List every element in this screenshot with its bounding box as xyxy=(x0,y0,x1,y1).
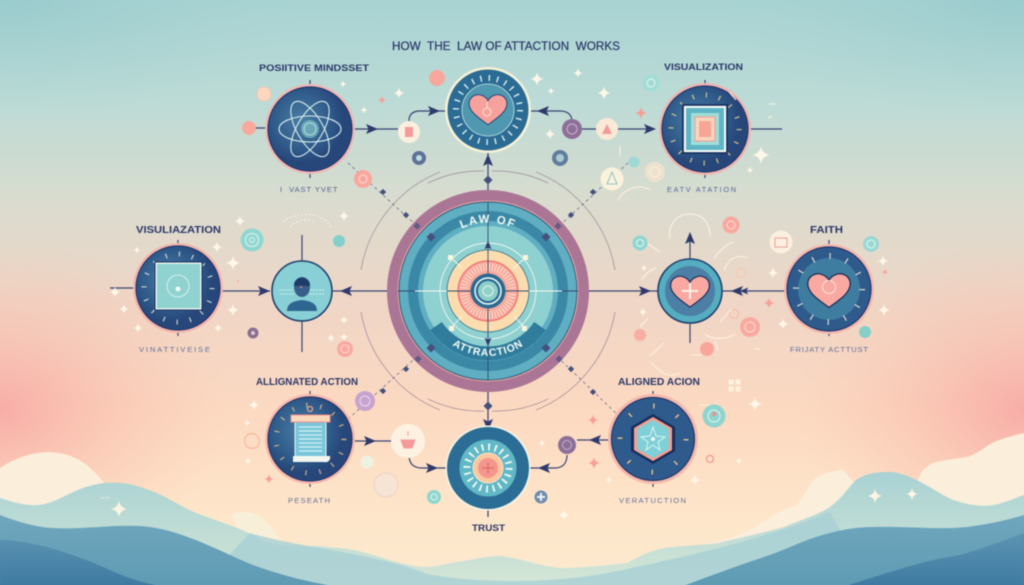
node: visualization left xyxy=(133,243,223,333)
node: right heart xyxy=(658,259,722,323)
label: aligned action: ALIGNED ACION xyxy=(618,377,700,388)
caption: visualization top: EATV ATATION xyxy=(667,185,736,194)
caption: faith: FRIJATY ACTTUST xyxy=(790,345,868,354)
node: positive mindset xyxy=(265,84,355,174)
label: visualization left: VISULIAZATION xyxy=(136,225,221,236)
caption: positive mindset: I VAST YVET xyxy=(280,185,338,194)
orbit arcs xyxy=(361,171,615,411)
dial text: attraction: ATTRACTION xyxy=(452,339,523,357)
caption: visualization left: VINATTIVEISE xyxy=(139,345,210,354)
central law of attraction dial xyxy=(386,190,590,392)
label: faith: FAITH xyxy=(810,224,843,236)
landscape hills xyxy=(0,433,1024,585)
small decorative badges xyxy=(240,70,879,504)
label: visualization top: VISUALIZATION xyxy=(664,61,743,72)
arrowheads xyxy=(258,106,748,473)
caption: veratuction: VERATUCTION xyxy=(619,496,686,505)
node: top heart xyxy=(445,67,531,153)
node: person xyxy=(272,261,332,321)
node: alligned action scroll xyxy=(265,394,355,484)
node: aligned action hexagon xyxy=(608,394,698,484)
connector lines and arrows xyxy=(110,80,829,517)
sparkles xyxy=(110,68,890,520)
title: HOW THE LAW OF ATTACTION WORKS xyxy=(392,41,620,53)
node: visualization top right xyxy=(659,83,751,175)
node: faith xyxy=(784,244,874,334)
label: alligned action: ALLIGNATED ACTION xyxy=(256,377,358,388)
dial text: law of: LAW OF xyxy=(458,214,516,229)
node: trust xyxy=(446,426,530,510)
label: trust: TRUST xyxy=(472,523,505,534)
caption: peseath: PESEATH xyxy=(288,496,330,505)
label: positive mindset: POSIITIVE MINDSSET xyxy=(259,63,369,74)
